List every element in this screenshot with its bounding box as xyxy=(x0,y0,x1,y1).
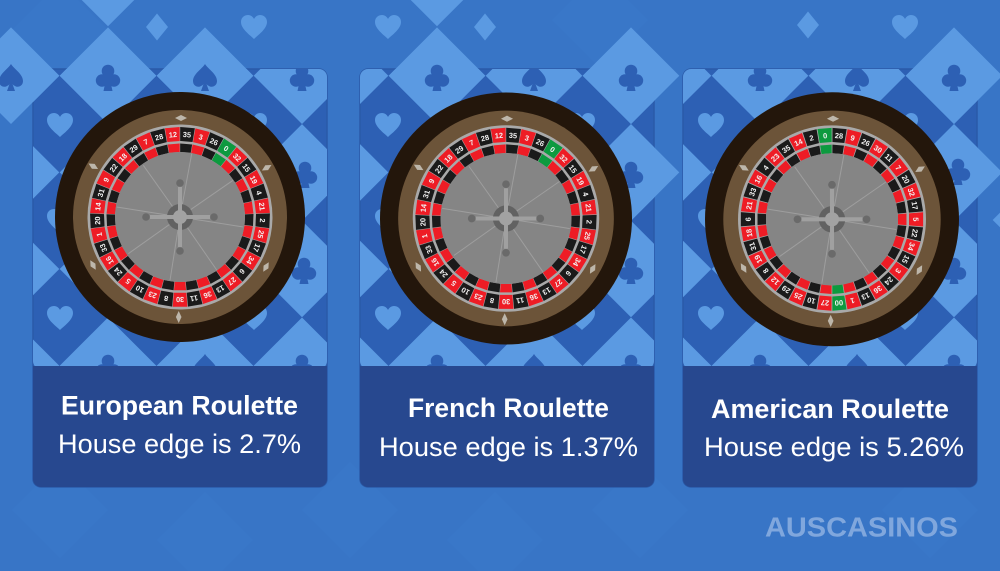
number pockets: French: 20 xyxy=(418,218,428,226)
number pockets: French: 31 xyxy=(421,189,432,200)
heading: American Roulette: American Roulette xyxy=(711,394,949,424)
number pockets: French: 9 xyxy=(427,177,437,185)
number pockets: European: 15 xyxy=(240,162,252,174)
number pockets: European: 11 xyxy=(189,293,199,303)
number pockets: French: 3 xyxy=(524,133,530,143)
number pockets: American: 19 xyxy=(752,253,764,265)
caption box: French xyxy=(360,366,654,487)
number pockets: European: 5 xyxy=(124,276,133,286)
caption box: American xyxy=(683,366,977,487)
number pockets: American: 29 xyxy=(780,283,792,295)
number pockets: European: 8 xyxy=(163,294,169,303)
number pockets: European: 34 xyxy=(244,254,256,267)
number pockets: French: 24 xyxy=(437,267,450,280)
number pockets: American: 21 xyxy=(744,201,754,210)
number pockets: European: 2 xyxy=(258,218,267,223)
number pockets: American: 20 xyxy=(900,174,912,185)
number pockets: European: 30 xyxy=(176,295,184,304)
number pockets: American: 2 xyxy=(808,133,815,143)
number pockets: European: 3 xyxy=(198,132,204,142)
number pockets: European: 27 xyxy=(226,275,238,287)
number pockets: European: 20 xyxy=(93,216,102,225)
number pockets: French: 36 xyxy=(528,291,539,302)
number pockets: American: 17 xyxy=(910,201,920,210)
number pockets: French: 5 xyxy=(449,278,458,288)
number pockets: French: 7 xyxy=(468,138,475,148)
number pockets: European: 26 xyxy=(208,136,220,148)
number pockets: French: 12 xyxy=(494,131,503,141)
number pockets: European: 23 xyxy=(147,289,158,300)
number pockets: French: 19 xyxy=(574,175,586,187)
number pockets: European: 21 xyxy=(257,202,267,211)
number pockets: French: 18 xyxy=(442,152,455,165)
number pockets: American: 7 xyxy=(893,163,903,172)
number pockets: French: 26 xyxy=(535,137,546,149)
panel pattern: European xyxy=(33,69,327,366)
number pockets: European: 31 xyxy=(96,188,107,198)
panel pattern: French xyxy=(360,69,654,366)
roulette wheel: European xyxy=(55,92,305,342)
number pockets: European xyxy=(55,92,305,342)
number pockets: European: 36 xyxy=(202,289,213,300)
number pockets: American: 4 xyxy=(761,163,771,172)
number pockets: American: 6 xyxy=(744,217,753,221)
number pockets: European: 10 xyxy=(134,283,146,295)
number pockets: European: 25 xyxy=(255,229,266,239)
number pockets: French: 15 xyxy=(567,163,579,175)
number pockets: French: 21 xyxy=(583,203,593,213)
number pockets: French: 2 xyxy=(584,220,594,224)
number pockets: European: 7 xyxy=(142,137,150,147)
number pockets: French: 14 xyxy=(419,202,429,213)
number pockets: European: 32 xyxy=(231,151,243,163)
number pockets: French: 27 xyxy=(552,277,564,289)
number pockets: French: 11 xyxy=(515,295,525,306)
heading: European Roulette: European Roulette xyxy=(61,390,298,420)
number pockets: French: 1 xyxy=(420,233,430,239)
number pockets: American: 8 xyxy=(761,266,771,275)
number pockets: American: 28 xyxy=(834,131,843,141)
panel: American Roulette xyxy=(682,68,978,488)
number pockets: French: 25 xyxy=(582,231,593,241)
roulette wheel: American xyxy=(705,92,959,346)
number pockets: American: 34 xyxy=(905,241,917,253)
heading: French Roulette: French Roulette xyxy=(408,393,609,423)
number pockets: American: 1 xyxy=(849,296,856,305)
number pockets: American: 00 xyxy=(834,298,843,308)
panel: European Roulette xyxy=(32,68,328,488)
number pockets: French: 13 xyxy=(541,285,552,297)
number pockets: American: 31 xyxy=(747,241,758,252)
number pockets: European: 0 xyxy=(222,144,230,153)
number pockets: European: 12 xyxy=(168,130,177,140)
number pockets: French: 22 xyxy=(433,163,445,175)
number pockets: American: 23 xyxy=(769,151,781,164)
roulette wheel: French xyxy=(380,92,632,344)
number pockets: American: 16 xyxy=(752,174,764,185)
panel: French Roulette xyxy=(359,68,655,488)
number pockets: French: 33 xyxy=(423,244,435,255)
number pockets: French: 34 xyxy=(570,256,583,269)
panel pattern: American xyxy=(683,69,977,366)
number pockets: European: 6 xyxy=(237,267,247,276)
pattern: unclipped light diamonds and suits xyxy=(0,0,1000,268)
number pockets: French: 17 xyxy=(577,244,589,255)
number pockets: French: 6 xyxy=(564,269,573,278)
number pockets: French: 0 xyxy=(548,145,557,154)
number pockets: American: 11 xyxy=(883,152,895,164)
number pockets: American: 9 xyxy=(849,133,856,143)
number pockets: American: 18 xyxy=(744,228,754,238)
number pockets: French: 16 xyxy=(429,256,441,268)
number pockets: American: 33 xyxy=(747,187,758,197)
number pockets: French xyxy=(380,93,632,344)
number pockets: American: 32 xyxy=(906,187,917,198)
number pockets: French: 29 xyxy=(453,144,465,156)
number pockets: American: 13 xyxy=(860,290,871,302)
number pockets: French: 23 xyxy=(473,291,484,303)
number pockets: European: 18 xyxy=(117,151,129,164)
number pockets: European: 29 xyxy=(128,143,140,155)
number pockets: American xyxy=(733,121,931,318)
text: American house edge: House edge is 5.26% xyxy=(704,432,964,462)
number pockets: European: 1 xyxy=(95,231,104,237)
number pockets: European: 33 xyxy=(98,242,109,253)
number pockets: American: 12 xyxy=(769,275,781,287)
number pockets: American: 14 xyxy=(793,136,805,148)
number pockets: European: 22 xyxy=(108,162,120,174)
number pockets: American: 36 xyxy=(872,283,884,296)
number pockets: American: 10 xyxy=(806,295,817,306)
number pockets: French: 10 xyxy=(460,285,471,297)
logo: AUSCASINOS: AUSCASINOS xyxy=(765,512,958,542)
number pockets: European: 17 xyxy=(251,242,262,253)
number pockets: European: 14 xyxy=(93,201,103,211)
number pockets: French: 4 xyxy=(581,191,591,198)
number pockets: American: 35 xyxy=(780,143,792,155)
number pockets: American: 25 xyxy=(793,290,804,302)
number pockets: American: 22 xyxy=(910,228,920,238)
number pockets: European: 35 xyxy=(182,130,191,140)
text: European house edge: House edge is 2.7% xyxy=(58,429,301,459)
number pockets: American: 3 xyxy=(893,266,903,275)
number pockets: American: 0 xyxy=(823,131,828,140)
number pockets: European: 9 xyxy=(101,176,111,184)
number pockets: European: 28 xyxy=(154,132,164,143)
caption box: European xyxy=(33,366,327,487)
number pockets: European: 13 xyxy=(215,283,226,295)
number pockets: European: 19 xyxy=(248,174,260,185)
number pockets: European: 4 xyxy=(254,189,264,197)
number pockets: French: 32 xyxy=(557,152,570,165)
number pockets: French: 8 xyxy=(489,296,495,305)
number pockets: American: 26 xyxy=(860,137,871,148)
number pockets: American: 5 xyxy=(911,217,920,221)
number pockets: American: 15 xyxy=(900,253,912,265)
number pockets: European: 16 xyxy=(104,254,116,266)
number pockets: American: 30 xyxy=(872,143,884,155)
number pockets: European: 24 xyxy=(111,265,124,278)
text: French house edge: House edge is 1.37% xyxy=(379,432,638,462)
number pockets: French: 28 xyxy=(480,133,490,143)
number pockets: American: 27 xyxy=(821,298,830,308)
number pockets: French: 30 xyxy=(502,297,510,306)
number pockets: French: 35 xyxy=(508,131,517,140)
number pockets: American: 24 xyxy=(882,275,895,288)
